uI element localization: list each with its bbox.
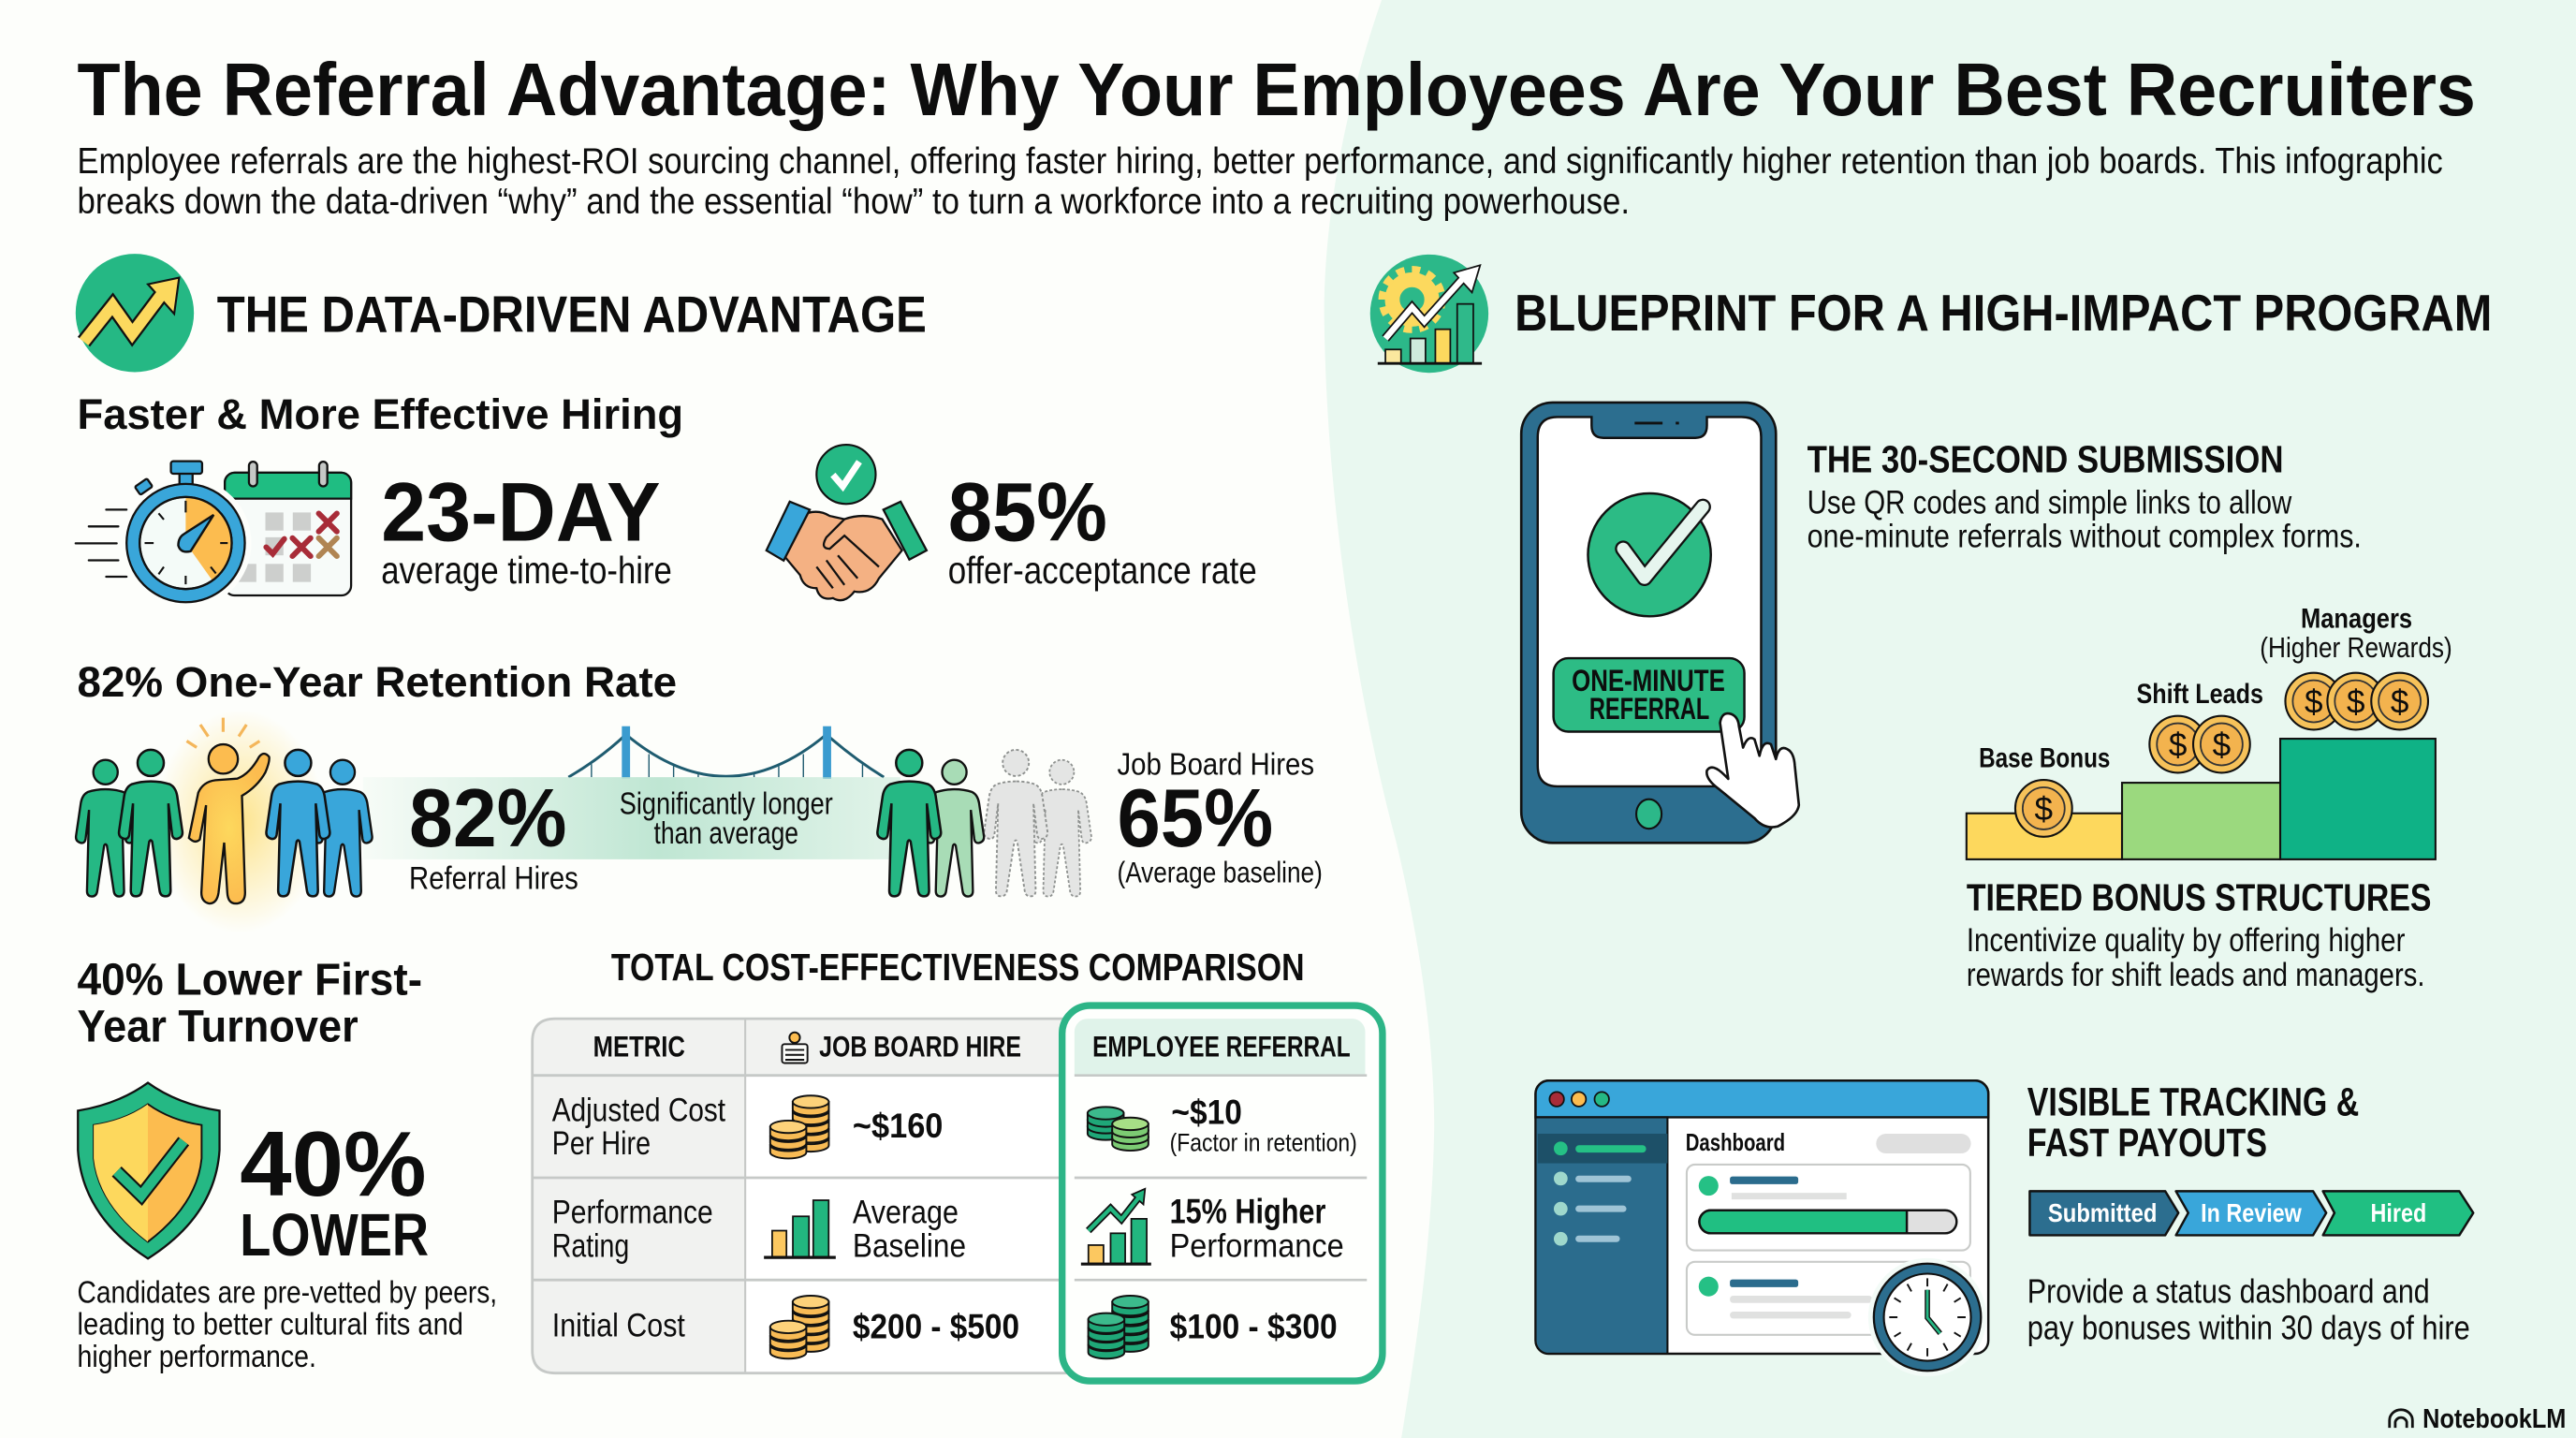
tier: shift leads: Shift Leads — [2136, 679, 2263, 710]
text block: 30-second submission — [1808, 437, 2362, 554]
panel: blueprint header — [1370, 255, 2492, 373]
heading: retention: 82% One-Year Retention Rate — [78, 658, 677, 706]
icon: referral hires group — [76, 710, 373, 933]
heading: cost comparison: TOTAL COST-EFFECTIVENESS COMPARISON — [611, 946, 1305, 989]
referral button: REFERRAL — [1589, 692, 1709, 726]
section heading: BLUEPRINT FOR A HIGH-IMPACT PROGRAM — [1515, 285, 2492, 342]
icon: gold coin stacks — [770, 1296, 828, 1358]
panel: employee referral column: (Factor in retention) — [1170, 1128, 1357, 1157]
panel: employee referral column: 15% Higher — [1170, 1193, 1325, 1231]
icon: gold coin stacks — [770, 1095, 828, 1158]
status card — [1687, 1165, 1970, 1251]
heading: lower turnover: 40% Lower First- — [78, 955, 422, 1005]
icon: stopwatch and calendar — [76, 462, 351, 609]
text block: tiered bonus structures: rewards for shift leads and managers. — [1967, 957, 2424, 993]
icon: phone with referral button — [1521, 403, 1799, 843]
column: metric labels — [552, 1029, 725, 1344]
section heading: THE DATA-DRIVEN ADVANTAGE — [217, 286, 927, 344]
title: The Referral Advantage: Why Your Employees Are Your Best Recruiters — [78, 48, 2476, 131]
clock — [1868, 1258, 1986, 1376]
tier: managers: (Higher Rewards) — [2260, 631, 2452, 664]
icon: small green coins — [1088, 1107, 1149, 1151]
stat: 85 percent: offer-acceptance rate — [948, 549, 1257, 592]
icon: baseline bars — [764, 1200, 836, 1257]
icon: rising arrow badge — [76, 254, 194, 373]
text block: status dashboard — [2027, 1272, 2470, 1346]
text block: tiered bonus structures: TIERED BONUS STRUCTURES — [1967, 875, 2431, 918]
icon: dashboard window: Dashboard — [1686, 1130, 1785, 1156]
text block: 30-second submission: THE 30-SECOND SUBMISSION — [1808, 437, 2284, 480]
tier: base bonus — [1979, 743, 2110, 837]
icon: bridge — [568, 726, 884, 779]
tier: shift leads: $ — [2213, 726, 2231, 763]
text block: tiered bonus structures: Incentivize quality by offering higher — [1967, 922, 2406, 959]
panel: comparison table — [533, 1019, 1068, 1373]
column: metric labels: Initial Cost — [552, 1308, 685, 1344]
second card — [1687, 1262, 1970, 1335]
tier: managers: $ — [2347, 683, 2365, 720]
status chevrons: In Review — [2201, 1198, 2302, 1227]
column: metric labels: Performance — [552, 1195, 713, 1231]
column: metric labels: METRIC — [593, 1029, 685, 1063]
text block: pre-vetted candidates — [78, 1275, 497, 1374]
tier: managers: Managers — [2301, 603, 2412, 634]
tier: managers — [2260, 603, 2452, 729]
icon: job board hires group — [877, 750, 1091, 897]
pointing hand — [1706, 713, 1799, 828]
icon: dashboard window — [1535, 1080, 1988, 1376]
icon: green coin stacks — [1089, 1296, 1149, 1358]
icon: handshake with check — [767, 445, 927, 600]
text block: 30-second submission: one-minute referrals without complex forms. — [1808, 518, 2362, 554]
stat: 82 percent referral hires: Referral Hires — [409, 860, 578, 896]
heading: lower turnover: Year Turnover — [78, 1001, 359, 1051]
stat: 85 percent: 85% — [948, 464, 1107, 558]
panel: data-driven advantage header — [76, 254, 927, 373]
tier: base bonus: $ — [2035, 791, 2053, 828]
text block: status dashboard: Provide a status dashboard and — [2027, 1272, 2430, 1311]
icon: job board person — [782, 1033, 808, 1064]
column: metric labels: Per Hire — [552, 1125, 651, 1162]
text block: pre-vetted candidates: Candidates are pre-vetted by peers, — [78, 1275, 497, 1310]
heading: visible tracking: VISIBLE TRACKING & — [2027, 1080, 2359, 1125]
tier: managers: $ — [2391, 683, 2408, 720]
referral button: ONE-MINUTE — [1572, 664, 1725, 697]
status chevrons: Hired — [2371, 1198, 2426, 1227]
intro text — [78, 141, 2443, 222]
stat: 65 percent job board hires — [1117, 747, 1323, 888]
stat: 40 percent lower — [240, 1112, 429, 1269]
panel: employee referral column — [1062, 1005, 1383, 1381]
stat: 85 percent — [948, 464, 1257, 592]
column: metric labels: Rating — [552, 1228, 629, 1265]
callout: longer than average: Significantly longer — [620, 787, 833, 822]
tier: shift leads — [2136, 679, 2263, 772]
tier: shift leads: $ — [2169, 726, 2187, 763]
stat: 82 percent referral hires: 82% — [409, 772, 567, 864]
retention band — [363, 777, 900, 859]
column: metric labels: Adjusted Cost — [552, 1093, 725, 1129]
stat: 40 percent lower: 40% — [240, 1112, 426, 1215]
heading: lower turnover — [78, 955, 422, 1051]
column: job board hire: Average — [853, 1195, 959, 1231]
stat: 65 percent job board hires: Job Board Hires — [1117, 747, 1314, 782]
panel: employee referral column: Performance — [1170, 1228, 1344, 1265]
stat: 65 percent job board hires: (Average baseline) — [1117, 855, 1323, 888]
referral button — [1554, 658, 1745, 732]
column: job board hire — [764, 1029, 1021, 1358]
column: job board hire: Baseline — [853, 1228, 966, 1265]
check badge — [1588, 493, 1711, 616]
text block: status dashboard: pay bonuses within 30 days of hire — [2027, 1308, 2470, 1346]
icon: rising bars — [1081, 1189, 1151, 1264]
heading: visible tracking — [2027, 1080, 2359, 1166]
stat: 23-day: average time-to-hire — [381, 549, 672, 592]
chart: tiered bonus steps — [1967, 603, 2452, 859]
text block: 30-second submission: Use QR codes and simple links to allow — [1808, 484, 2292, 521]
callout: longer than average — [620, 787, 833, 851]
stat: 65 percent job board hires: 65% — [1117, 772, 1273, 864]
text block: tiered bonus structures — [1967, 875, 2431, 993]
column: job board hire: ~$160 — [853, 1107, 943, 1145]
icon: shield with check — [78, 1083, 220, 1258]
status chevrons — [2029, 1191, 2473, 1235]
panel: employee referral column: ~$10 — [1171, 1093, 1242, 1131]
tier: managers: $ — [2305, 683, 2323, 720]
column: job board hire: JOB BOARD HIRE — [819, 1029, 1021, 1063]
tier: base bonus: Base Bonus — [1979, 743, 2110, 774]
stat: 23-day: 23-DAY — [381, 464, 661, 558]
stat: 40 percent lower: LOWER — [240, 1201, 429, 1269]
panel: employee referral column: $100 - $300 — [1170, 1307, 1338, 1345]
column: job board hire: $200 - $500 — [853, 1307, 1019, 1345]
status chevrons: Submitted — [2048, 1198, 2157, 1227]
text block: pre-vetted candidates: higher performance. — [78, 1340, 316, 1374]
panel: employee referral column: EMPLOYEE REFERRAL — [1092, 1029, 1351, 1063]
intro text: breaks down the data-driven “why” and the essential “how” to turn a workforce into a recruiting powerhouse. — [78, 182, 1630, 222]
heading: faster hiring: Faster & More Effective Hiring — [78, 390, 683, 438]
icon: gear and growth badge — [1370, 255, 1488, 373]
heading: visible tracking: FAST PAYOUTS — [2027, 1121, 2267, 1166]
text block: pre-vetted candidates: leading to better cultural fits and — [78, 1308, 463, 1343]
callout: longer than average: than average — [654, 816, 798, 851]
